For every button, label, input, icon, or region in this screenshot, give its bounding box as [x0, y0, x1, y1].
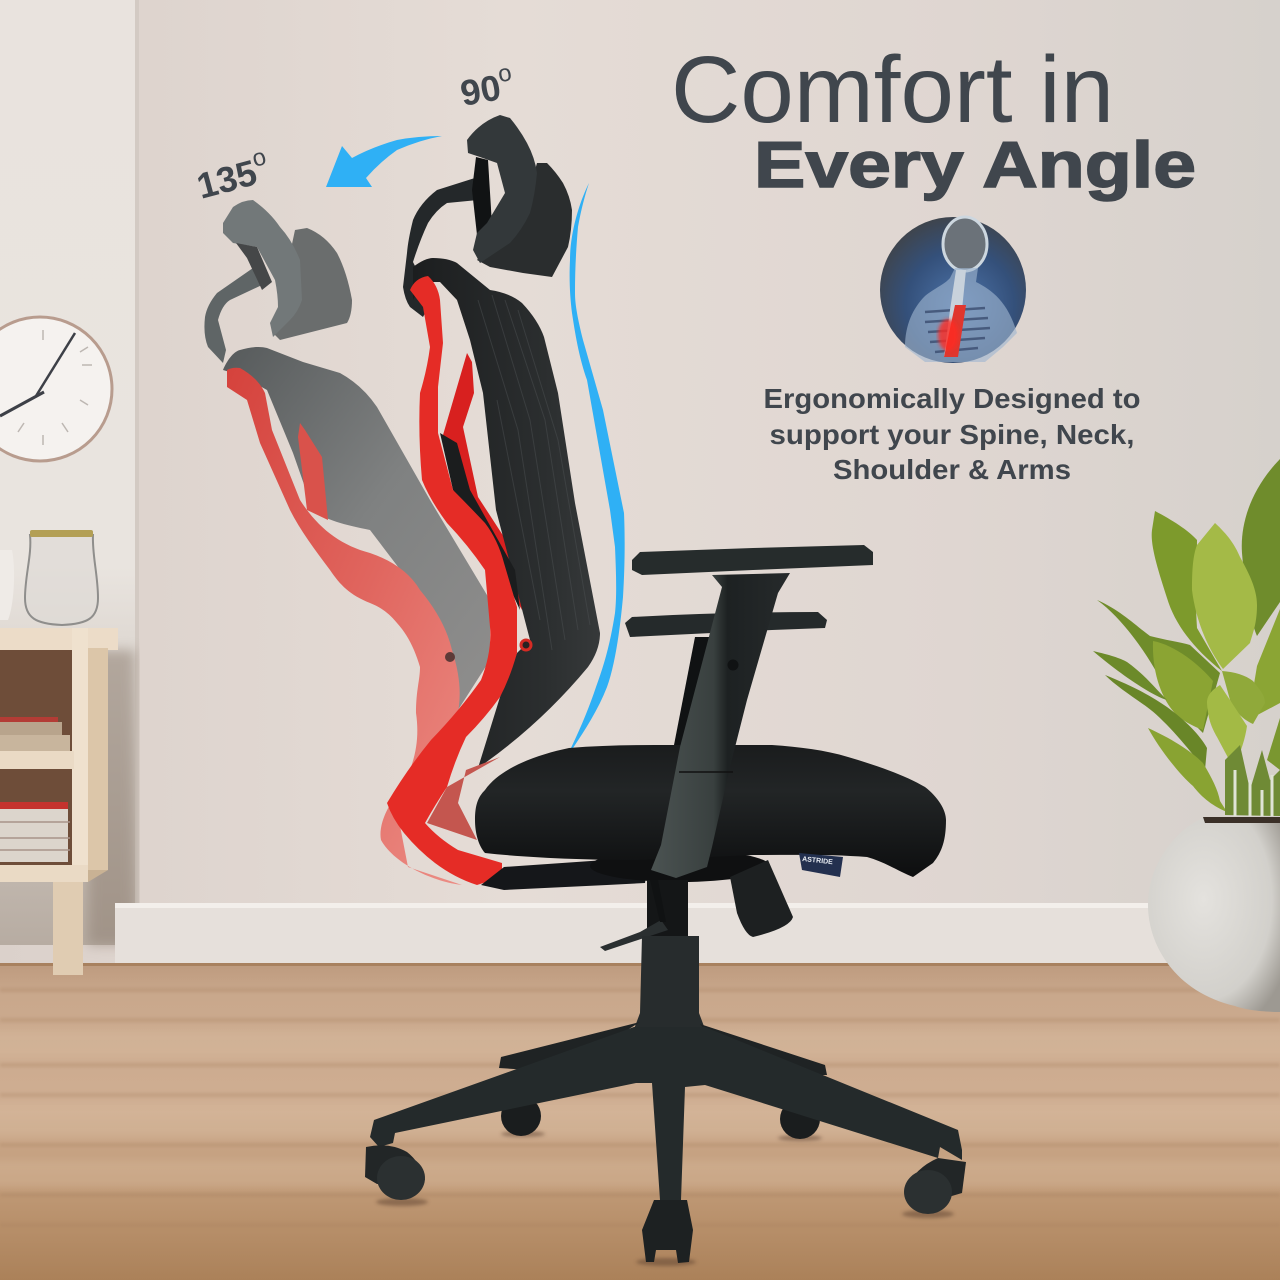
- armrest upright: [651, 573, 790, 878]
- dark bracket: [440, 433, 520, 610]
- wooden shelf: [0, 628, 118, 975]
- red rear strut: [443, 353, 522, 610]
- headrest ring: [467, 115, 537, 263]
- books: [0, 717, 70, 862]
- upper armrest: [632, 545, 873, 575]
- baseboard: [115, 903, 1280, 965]
- headrest bracket: [472, 157, 492, 235]
- glass jar: [0, 530, 98, 625]
- ghost headrest cushion: [273, 228, 352, 340]
- seat mechanism: [481, 850, 770, 890]
- plant pot: [1148, 817, 1280, 1012]
- ghost red frame: [227, 368, 462, 885]
- title: Comfort in: [671, 37, 1114, 143]
- label: 90 degrees: 90: [457, 67, 504, 114]
- text block: description: Shoulder & Arms: [833, 454, 1071, 485]
- blue spine curve: [570, 183, 625, 748]
- gas lever: [600, 920, 668, 951]
- title: Every Angle: [754, 128, 1196, 201]
- reclined chair ghost at 135 degrees: [204, 200, 490, 885]
- wall background: [0, 0, 1280, 965]
- wood floor: [0, 963, 1280, 1280]
- lower dark red web: [427, 757, 500, 840]
- spine: [944, 270, 966, 357]
- shoulders: [905, 268, 1017, 362]
- seat label: ASTRIDE: [802, 856, 833, 866]
- ribs: [925, 308, 990, 352]
- label: 135 degrees: 135: [192, 152, 261, 207]
- ghost headrest ring: [223, 200, 302, 337]
- left wall column: [0, 0, 139, 945]
- icon: spine x-ray: [880, 217, 1026, 363]
- mesh back cushion: [413, 258, 600, 768]
- star base front legs: [370, 1027, 962, 1200]
- head: [943, 217, 987, 271]
- caster shadows: [376, 1131, 954, 1266]
- arrow: tilt direction: [326, 136, 442, 187]
- lever arm link: [650, 880, 666, 922]
- text block: description: [764, 383, 1140, 485]
- text block: description: Ergonomically Designed to: [764, 383, 1140, 414]
- headrest support: [403, 177, 478, 317]
- label: 135 degrees: o: [249, 143, 269, 173]
- gas lift neck: [647, 880, 688, 940]
- title: [671, 37, 1196, 201]
- back screw: [520, 638, 532, 652]
- tilt knob: [730, 860, 793, 937]
- right caster: [904, 1158, 966, 1214]
- ghost headrest support: [204, 268, 262, 363]
- upright chair: [365, 115, 966, 1263]
- ghost mesh back: [223, 347, 490, 710]
- seat cushion: [475, 745, 946, 877]
- seat label: [799, 853, 843, 877]
- text block: description: support your Spine, Neck,: [770, 419, 1134, 450]
- wall clock: [0, 317, 112, 461]
- left caster: [365, 1145, 425, 1200]
- headrest cushion: [477, 163, 572, 277]
- rear casters: [501, 1096, 541, 1136]
- label: 90 degrees: o: [496, 59, 514, 88]
- star base back legs: [499, 1022, 827, 1075]
- ghost red strut: [298, 423, 328, 520]
- red frame: [387, 276, 517, 885]
- lower armrest: [625, 612, 827, 637]
- front caster: [642, 1200, 693, 1263]
- gas lift cylinder: [634, 936, 705, 1029]
- lower arm support: [674, 637, 712, 745]
- plant leaves: [1093, 459, 1280, 816]
